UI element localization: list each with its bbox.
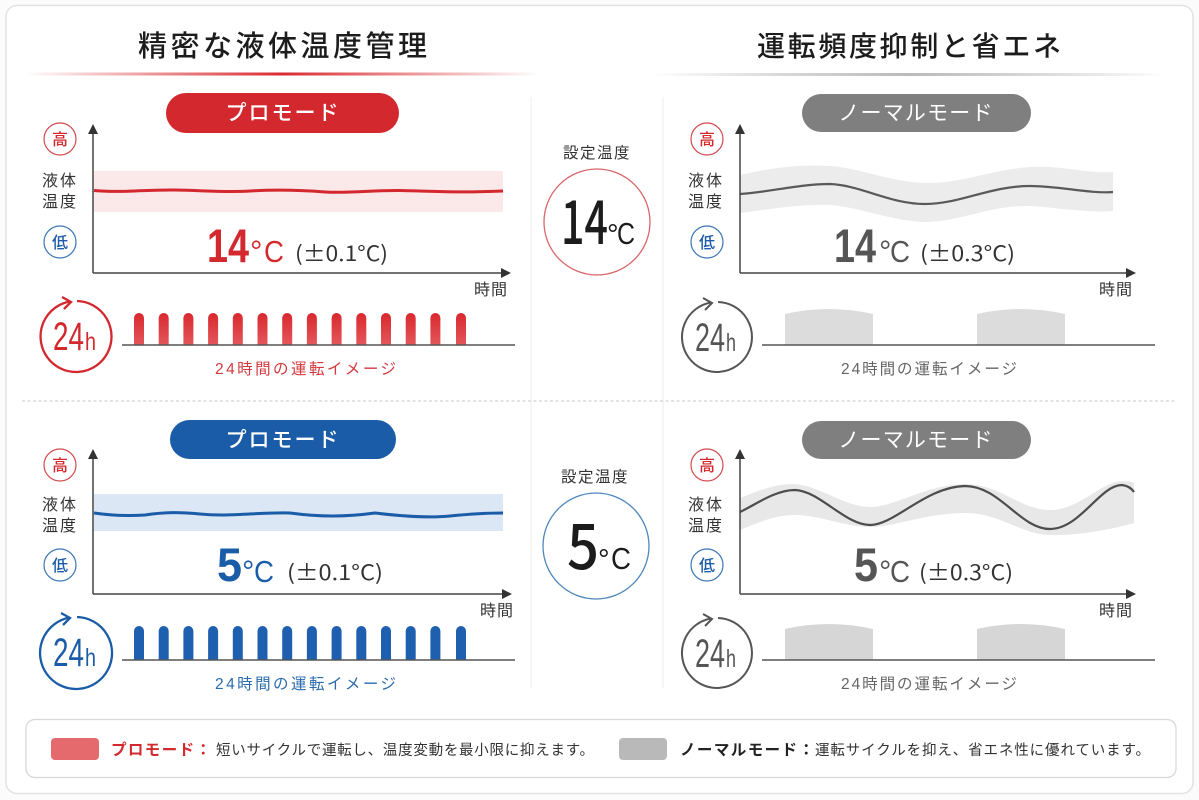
caption: 24時間の運転イメージ bbox=[841, 360, 1017, 378]
axis labels: high, liquid temperature, low: 高 bbox=[52, 457, 68, 475]
badge: normal mode bbox=[802, 421, 1031, 459]
icon: 24h cycle: h bbox=[85, 644, 96, 672]
heading: reduced frequency and energy saving: 運転頻度抑制と省エネ bbox=[757, 31, 1061, 62]
label: set temperature: 設定温度 bbox=[563, 144, 631, 162]
badge: pro mode blue bbox=[170, 420, 396, 459]
value: 5°C ±0.3°C: C bbox=[890, 554, 910, 589]
value: 14°C ±0.3°C bbox=[834, 219, 1015, 272]
panel: setpoint 5°C bbox=[543, 468, 649, 599]
circle: 14°C: C bbox=[617, 216, 635, 251]
icon: 24h cycle bbox=[41, 297, 112, 372]
badge: normal mode: ノーマルモード bbox=[838, 102, 994, 125]
value: 5°C ±0.1°C: 5 bbox=[217, 538, 242, 591]
value: 14°C ±0.1°C: (±0.1°C) bbox=[295, 238, 388, 268]
value: 14°C ±0.3°C: ° bbox=[879, 234, 891, 269]
blocks: infrequent operation bbox=[762, 624, 1155, 660]
circle: 14°C bbox=[544, 169, 650, 275]
line chart: normal 5°C bbox=[735, 449, 1136, 620]
axis labels: high, liquid temperature, low: 温度 bbox=[42, 517, 78, 535]
panel: pro mode 14°C bbox=[41, 93, 515, 378]
value: 5°C ±0.1°C: (±0.1°C) bbox=[287, 557, 383, 587]
value: 5°C ±0.3°C: (±0.3°C) bbox=[919, 557, 1013, 587]
line chart: pro 5°C bbox=[88, 449, 514, 620]
axis labels: high, liquid temperature, low: 低 bbox=[52, 234, 68, 252]
value: 14°C ±0.3°C: C bbox=[890, 234, 910, 269]
line chart: pro 14°C: 時間 bbox=[474, 281, 508, 299]
legend item: pro mode: 短いサイクルで運転し、温度変動を最小限に抑えます。 bbox=[216, 742, 594, 759]
axis labels: high, liquid temperature, low bbox=[688, 123, 724, 258]
legend item: normal mode: 運転サイクルを抑え、省エネ性に優れています。 bbox=[815, 742, 1150, 759]
badge: normal mode: ノーマルモード bbox=[838, 429, 994, 452]
icon: 24h cycle: 24 bbox=[53, 631, 84, 675]
icon: 24h cycle bbox=[682, 298, 752, 372]
circle: 14°C: 14 bbox=[561, 176, 608, 261]
badge: pro mode red: プロモード bbox=[226, 102, 340, 125]
icon: 24h cycle: 24 bbox=[695, 316, 725, 360]
heading underline: red bbox=[25, 72, 540, 76]
axis labels: high, liquid temperature, low bbox=[688, 449, 724, 581]
value: 14°C ±0.3°C: 14 bbox=[834, 219, 876, 272]
legend bbox=[26, 720, 1176, 778]
bars: frequent operation bbox=[122, 313, 515, 345]
axis labels: high, liquid temperature, low: 温度 bbox=[688, 517, 724, 535]
badge: normal mode bbox=[802, 94, 1031, 132]
axis labels: high, liquid temperature, low bbox=[42, 449, 78, 581]
value: 14°C ±0.3°C: (±0.3°C) bbox=[920, 238, 1015, 268]
caption: 24時間の運転イメージ bbox=[215, 360, 396, 378]
line chart: normal 5°C: 時間 bbox=[1099, 602, 1133, 620]
value: 5°C ±0.3°C: 5 bbox=[854, 538, 878, 591]
legend item: pro mode bbox=[51, 738, 594, 760]
value: 5°C ±0.1°C: C bbox=[254, 554, 274, 589]
caption: 24時間の運転イメージ bbox=[841, 675, 1017, 693]
circle: 5°C: 5 bbox=[567, 498, 599, 587]
circle: 5°C bbox=[543, 493, 649, 599]
axis labels: high, liquid temperature, low bbox=[42, 123, 78, 258]
blocks: infrequent operation bbox=[762, 309, 1155, 345]
axis labels: high, liquid temperature, low: 高 bbox=[699, 131, 715, 149]
legend item: normal mode bbox=[619, 738, 1150, 760]
axis labels: high, liquid temperature, low: 高 bbox=[699, 457, 715, 475]
row divider bbox=[22, 400, 1175, 402]
axis labels: high, liquid temperature, low: 液体 bbox=[42, 172, 78, 190]
circle: 5°C: C bbox=[611, 541, 631, 576]
axis labels: high, liquid temperature, low: 液体 bbox=[688, 172, 724, 190]
icon: 24h cycle: h bbox=[85, 328, 96, 356]
bars: frequent operation bbox=[122, 626, 515, 660]
icon: 24h cycle: 24 bbox=[695, 632, 725, 676]
line chart: pro 14°C bbox=[88, 124, 511, 299]
axis labels: high, liquid temperature, low: 温度 bbox=[688, 193, 724, 211]
legend item: pro mode: プロモード： bbox=[111, 741, 211, 759]
line chart: normal 14°C: 時間 bbox=[1099, 281, 1133, 299]
value: 5°C ±0.3°C: ° bbox=[879, 554, 891, 589]
panel: pro mode 5°C bbox=[40, 420, 515, 693]
label: set temperature: 設定温度 bbox=[561, 468, 629, 486]
value: 5°C ±0.1°C bbox=[217, 538, 383, 591]
heading: precise temperature control: 精密な液体温度管理 bbox=[138, 30, 427, 63]
axis labels: high, liquid temperature, low: 低 bbox=[699, 234, 715, 252]
badge: pro mode blue: プロモード bbox=[226, 429, 340, 452]
axis labels: high, liquid temperature, low: 液体 bbox=[688, 496, 724, 514]
icon: 24h cycle: h bbox=[726, 329, 736, 357]
value: 14°C ±0.1°C bbox=[207, 219, 388, 272]
caption: 24時間の運転イメージ bbox=[215, 675, 396, 693]
axis labels: high, liquid temperature, low: 低 bbox=[699, 557, 715, 575]
icon: 24h cycle bbox=[682, 614, 752, 688]
line chart: pro 5°C: 時間 bbox=[480, 602, 514, 620]
axis labels: high, liquid temperature, low: 温度 bbox=[42, 193, 78, 211]
value: 14°C ±0.1°C: C bbox=[264, 234, 284, 269]
value: 5°C ±0.3°C bbox=[854, 538, 1013, 591]
value: 5°C ±0.1°C: ° bbox=[242, 554, 254, 589]
line chart: normal 14°C bbox=[735, 124, 1136, 299]
center column dividers bbox=[531, 97, 663, 688]
axis labels: high, liquid temperature, low: 低 bbox=[52, 557, 68, 575]
badge: pro mode red bbox=[166, 93, 399, 133]
value: 14°C ±0.1°C: ° bbox=[250, 234, 262, 269]
panel: normal mode 14°C bbox=[682, 94, 1155, 378]
value: 14°C ±0.1°C: 14 bbox=[207, 219, 249, 272]
heading underline: grey bbox=[652, 73, 1167, 76]
axis labels: high, liquid temperature, low: 液体 bbox=[42, 496, 78, 514]
circle: 5°C: ° bbox=[598, 544, 610, 576]
panel: normal mode 5°C bbox=[682, 421, 1155, 693]
icon: 24h cycle bbox=[40, 613, 112, 689]
legend item: normal mode: ノーマルモード： bbox=[680, 742, 814, 759]
panel: setpoint 14°C bbox=[544, 144, 650, 275]
icon: 24h cycle: h bbox=[726, 645, 736, 673]
icon: 24h cycle: 24 bbox=[53, 315, 84, 359]
axis labels: high, liquid temperature, low: 高 bbox=[52, 131, 68, 149]
circle: 14°C: ° bbox=[607, 219, 619, 251]
